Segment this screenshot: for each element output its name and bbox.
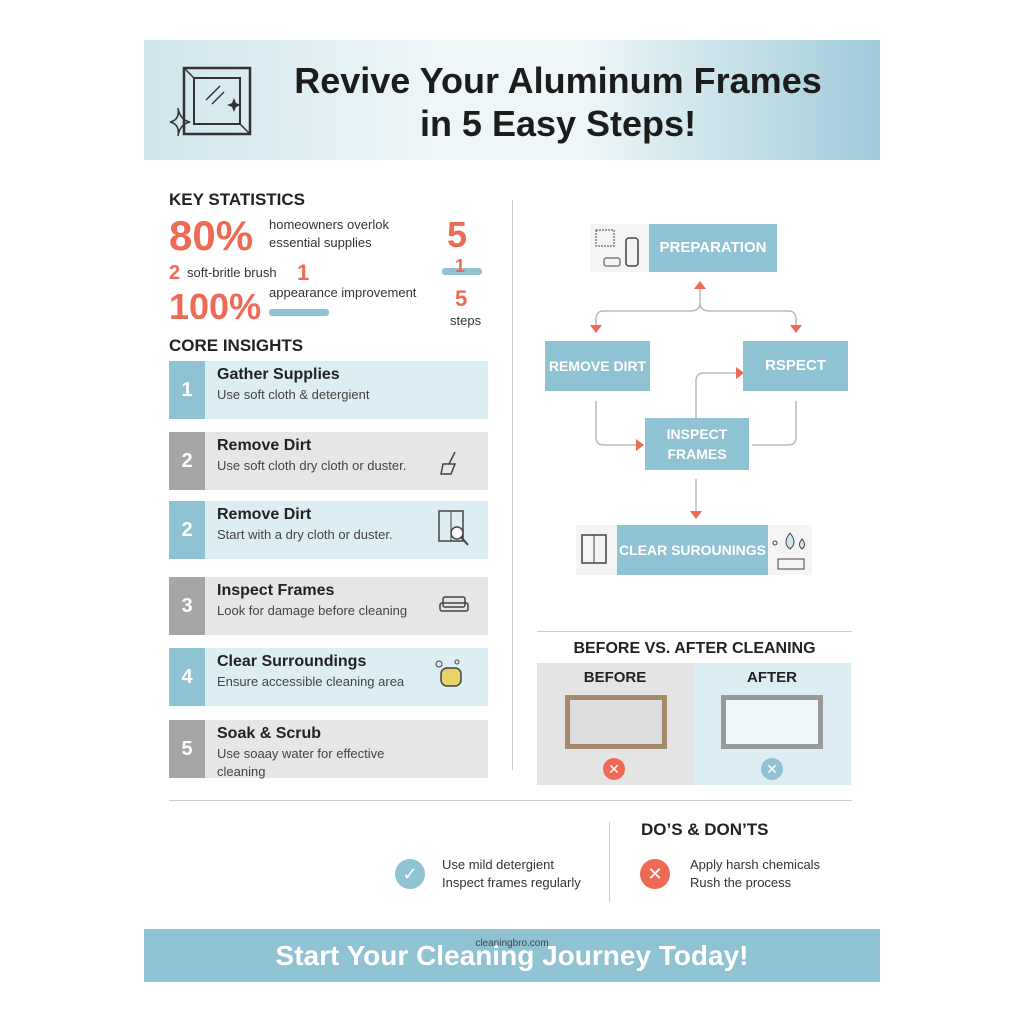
card 2: Use soft cloth dry cloth or duster. xyxy=(217,458,406,473)
stats block: 5 xyxy=(455,286,467,311)
remove dirt node: REMOVE DIRT xyxy=(549,358,646,374)
do list: Inspect frames regularly xyxy=(442,875,581,890)
card 6: Soak & Scrub xyxy=(217,725,321,742)
card 6 xyxy=(169,720,488,778)
title xyxy=(294,60,822,144)
dont list: ✕ xyxy=(647,864,663,884)
card 2: 2 xyxy=(181,450,193,472)
dos and donts heading: DO’S & DON’TS xyxy=(641,820,769,839)
stats block: 1 xyxy=(455,256,465,276)
stats block: appearance improvement xyxy=(269,285,416,300)
do list: Use mild detergient xyxy=(442,857,554,872)
card 3: Start with a dry cloth or duster. xyxy=(217,527,393,542)
card 1: Use soft cloth & detergient xyxy=(217,387,369,402)
card 4 xyxy=(169,577,488,635)
inspect frames node: FRAMES xyxy=(667,446,727,462)
card 6: Use soaay water for effective xyxy=(217,746,384,761)
stats block: homeowners overlok xyxy=(269,217,389,232)
card 3: Remove Dirt xyxy=(217,506,311,523)
before after section xyxy=(537,631,852,785)
icon: window frame xyxy=(170,66,252,136)
stats block: 100% xyxy=(169,286,261,327)
after panel: ✕ xyxy=(766,761,778,777)
vertical divider xyxy=(512,200,513,770)
card 4: 3 xyxy=(181,594,193,616)
card 4: Look for damage before cleaning xyxy=(217,603,407,618)
preparation node xyxy=(590,224,650,272)
stats block: 5 xyxy=(447,214,467,255)
card 6: 5 xyxy=(181,738,193,760)
card 2 xyxy=(169,432,488,490)
inspect frames node xyxy=(645,418,749,470)
horizontal divider xyxy=(169,800,852,801)
before after heading: BEFORE VS. AFTER CLEANING xyxy=(573,640,816,657)
card 5: 4 xyxy=(181,666,193,688)
flowchart: CLEAR SUROUNINGS xyxy=(619,542,766,558)
stats block: 2 xyxy=(169,262,180,284)
do list xyxy=(395,857,581,890)
dont list: Rush the process xyxy=(690,875,791,890)
card 4: Inspect Frames xyxy=(217,582,334,599)
stats block: essential supplies xyxy=(269,235,372,250)
clear surroundings node xyxy=(576,525,812,575)
card 1 xyxy=(169,361,488,419)
footer banner: cleaningbro.com xyxy=(475,938,549,949)
remove dirt node xyxy=(545,341,650,391)
core insights heading: CORE INSIGHTS xyxy=(169,336,303,355)
card 1: 1 xyxy=(181,378,193,400)
before panel: ✕ xyxy=(608,761,620,777)
footer banner: Start Your Cleaning Journey Today! xyxy=(276,940,748,971)
flowchart: PREPARATION xyxy=(660,239,766,256)
before panel: BEFORE xyxy=(584,669,646,686)
card 1: Gather Supplies xyxy=(217,366,340,383)
stats block: soft-britle brush xyxy=(187,265,277,280)
rspect node xyxy=(743,341,848,391)
card 5: Clear Surroundings xyxy=(217,653,366,670)
card 5 xyxy=(169,648,488,706)
card 3 xyxy=(169,501,488,559)
stats block xyxy=(169,212,482,328)
after panel: AFTER xyxy=(747,669,797,686)
key statistics heading: KEY STATISTICS xyxy=(169,190,305,209)
rspect node: RSPECT xyxy=(765,357,826,374)
stats block: 80% xyxy=(169,212,253,259)
footer banner xyxy=(144,929,880,982)
card 5: Ensure accessible cleaning area xyxy=(217,674,404,689)
card 6: cleaning xyxy=(217,764,265,779)
card 3: 2 xyxy=(181,518,193,540)
flow connectors xyxy=(590,281,802,519)
header banner xyxy=(144,40,880,160)
do list: ✓ xyxy=(402,864,418,884)
card 2: Remove Dirt xyxy=(217,437,311,454)
title: in 5 Easy Steps! xyxy=(420,103,696,144)
before panel xyxy=(537,663,693,785)
dont list xyxy=(640,857,820,890)
inspect frames node: INSPECT xyxy=(667,426,727,442)
dont list: Apply harsh chemicals xyxy=(690,857,820,872)
stats block: 1 xyxy=(297,260,309,285)
after panel xyxy=(693,663,851,785)
stats block: steps xyxy=(450,313,481,328)
title: Revive Your Aluminum Frames xyxy=(294,60,822,101)
flowchart xyxy=(545,224,848,575)
